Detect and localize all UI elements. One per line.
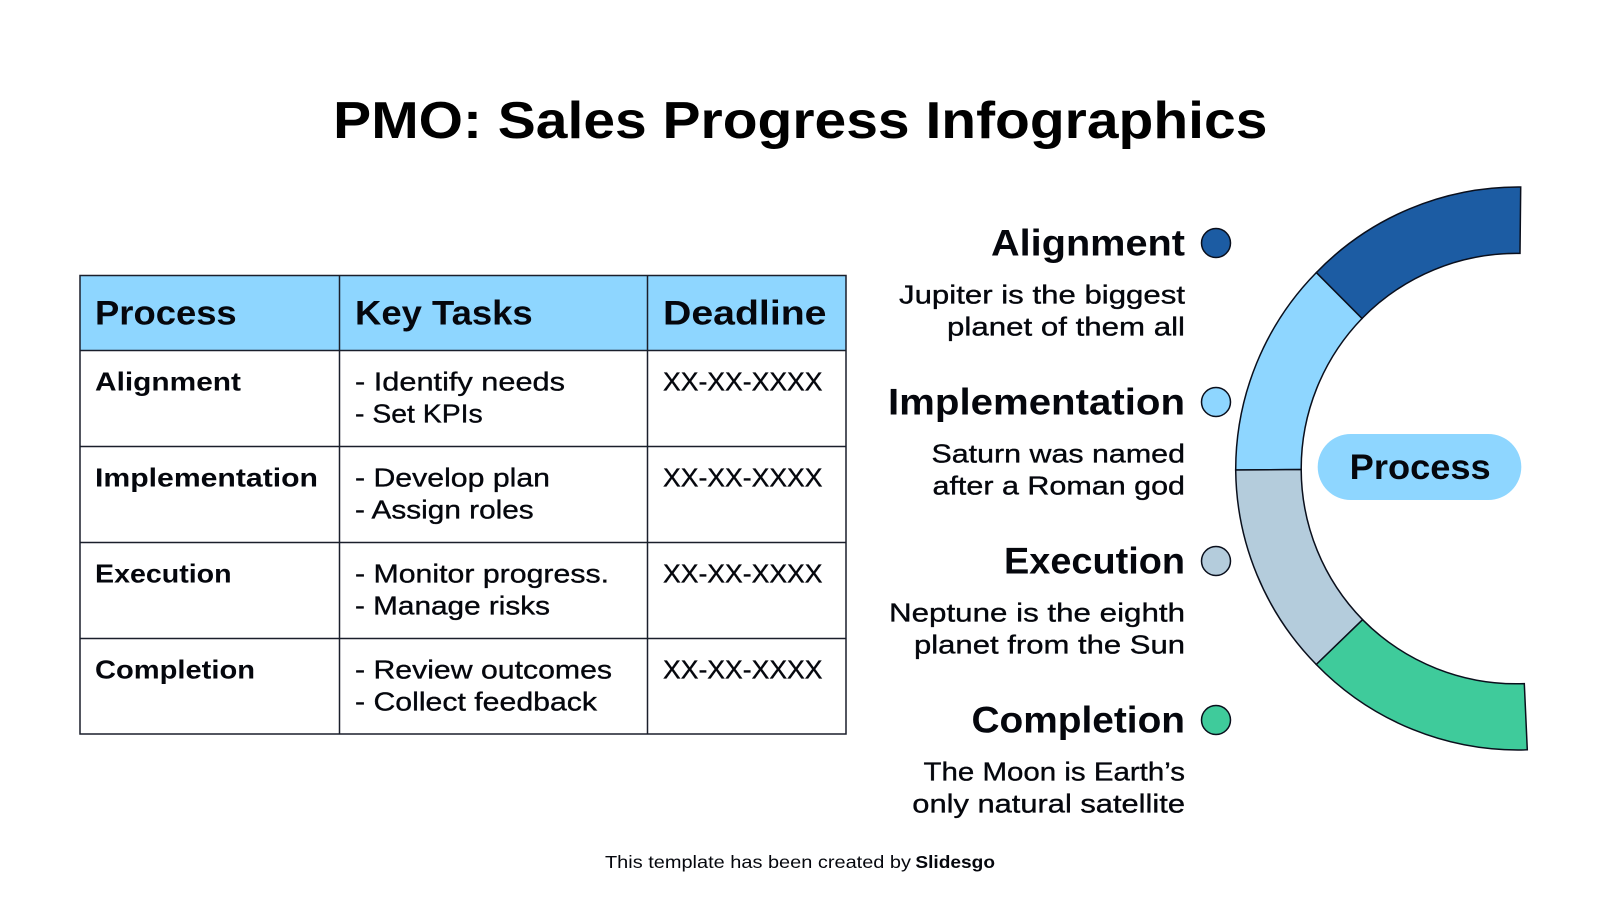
ring segment: Implementation [1236, 273, 1362, 470]
row: Completion: - Collect feedback [355, 686, 598, 716]
row: Implementation: - Assign roles [355, 494, 534, 524]
row: Completion [95, 654, 822, 716]
footer credit [605, 852, 995, 872]
list item: Execution: Neptune is the eighth [889, 598, 1185, 628]
table [80, 276, 846, 734]
row: Implementation [95, 462, 822, 524]
list item: Implementation [888, 382, 1185, 500]
list item: Alignment: Alignment [991, 222, 1185, 264]
list item: Alignment: planet of them all [947, 312, 1185, 342]
ring segment: Alignment [1316, 187, 1521, 318]
list item: Execution: planet from the Sun [914, 630, 1185, 660]
row: Completion: XX-XX-XXXX [663, 654, 822, 684]
table header row: Deadline [663, 294, 826, 332]
list item: Implementation: after a Roman god [932, 470, 1185, 500]
row: Execution: - Manage risks [355, 590, 550, 620]
table header row: Process [95, 294, 237, 332]
footer credit: This template has been created by [605, 852, 911, 872]
row: Alignment: - Identify needs [355, 366, 565, 396]
list item: Implementation: Implementation [888, 382, 1185, 422]
table header row: Key Tasks [355, 294, 533, 332]
row: Alignment: XX-XX-XXXX [663, 366, 822, 396]
row: Execution: XX-XX-XXXX [663, 558, 822, 588]
row: Alignment: Alignment [95, 366, 241, 396]
row: Implementation: - Develop plan [355, 462, 550, 492]
legend dots [1202, 228, 1230, 734]
list item: Alignment [899, 222, 1186, 342]
list item: Alignment: Jupiter is the biggest [899, 280, 1186, 310]
list item: Execution [889, 540, 1185, 660]
row: Completion: - Review outcomes [355, 654, 612, 684]
ring chart [1236, 187, 1527, 750]
row: Alignment [95, 366, 822, 428]
title: PMO: Sales Progress Infographics [333, 92, 1267, 150]
row: Completion: Completion [95, 654, 255, 684]
ring segment: Execution [1236, 470, 1363, 664]
list item: Implementation: Saturn was named [932, 438, 1185, 468]
footer credit: Slidesgo [915, 852, 995, 872]
list item: Completion: The Moon is Earth’s [924, 756, 1185, 786]
center pill: Process: Process [1350, 448, 1491, 487]
list item: Completion: only natural satellite [912, 788, 1185, 818]
row: Execution: - Monitor progress. [355, 558, 609, 588]
row: Execution [95, 558, 822, 620]
row: Implementation: XX-XX-XXXX [663, 462, 822, 492]
list item: Completion [912, 700, 1185, 818]
row: Implementation: Implementation [95, 462, 318, 492]
list item: Execution: Execution [1004, 540, 1185, 582]
center pill: Process [1318, 434, 1521, 500]
row: Alignment: - Set KPIs [355, 398, 483, 428]
row: Execution: Execution [95, 558, 232, 588]
table header row [80, 276, 846, 350]
ring segment: Completion [1316, 620, 1527, 750]
list item: Completion: Completion [972, 700, 1185, 740]
